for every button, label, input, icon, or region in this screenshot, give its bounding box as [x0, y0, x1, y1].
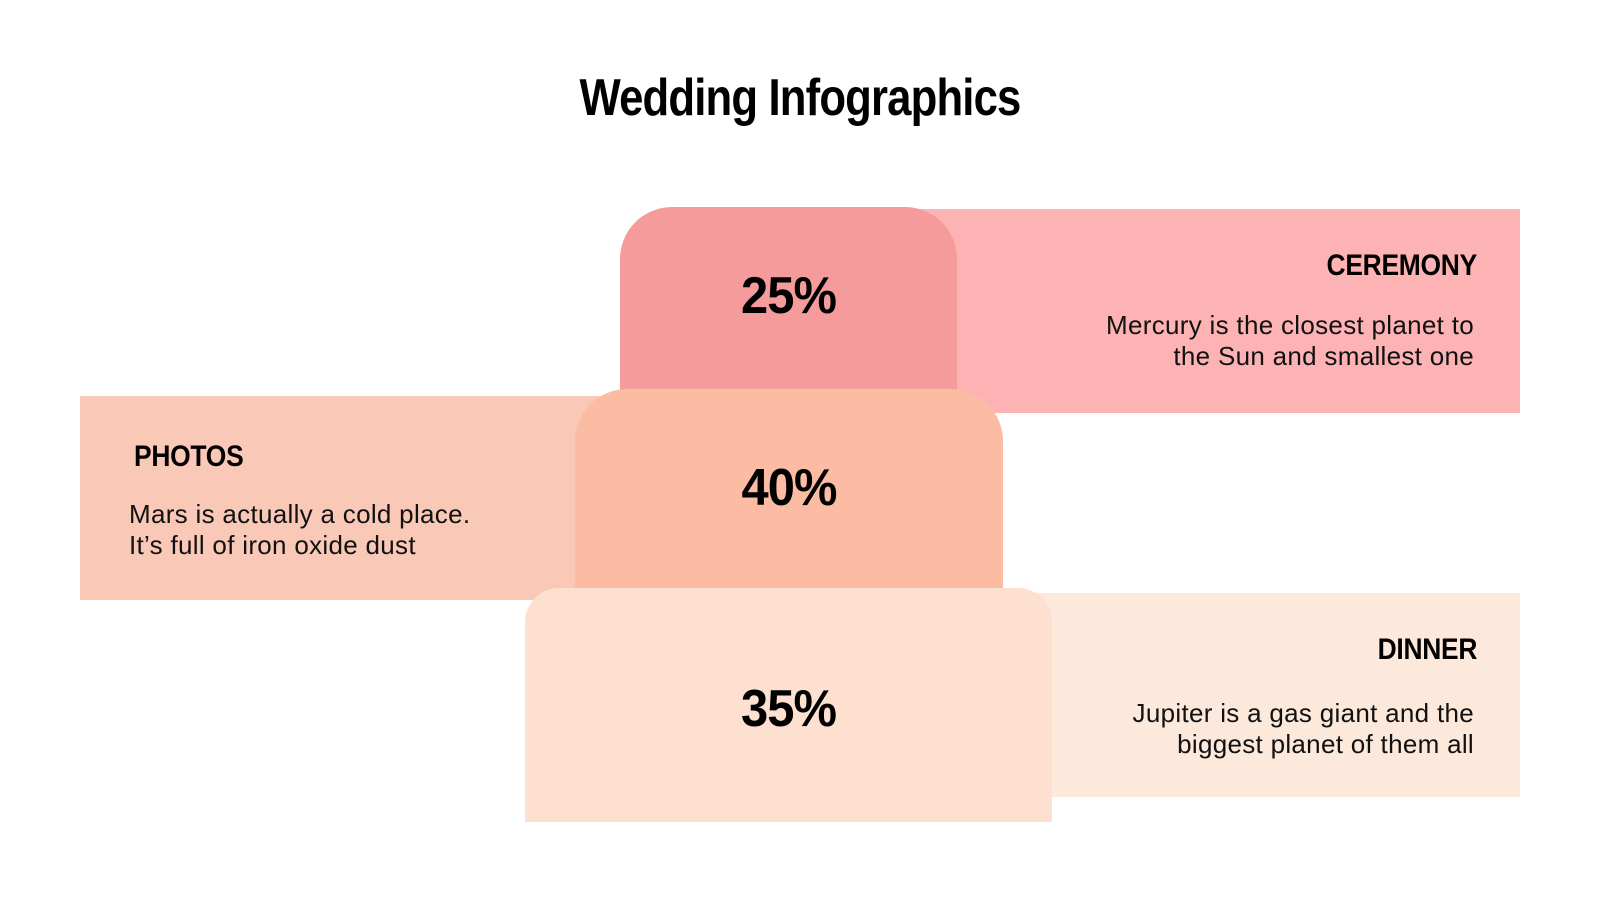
text: ceremony: Mercury is the closest planet to: [1106, 310, 1474, 340]
text: ceremony: [1106, 310, 1474, 371]
panel: ceremony band: [918, 209, 1520, 413]
text: photos: [129, 499, 470, 560]
percentage: 35%: 35%: [741, 680, 836, 738]
text: ceremony: the Sun and smallest one: [1173, 341, 1474, 371]
text: dinner: Jupiter is a gas giant and the: [1133, 698, 1474, 728]
text: dinner: biggest planet of them all: [1177, 729, 1474, 759]
cake tier: middle 40%: [575, 389, 1003, 592]
panel: dinner band: [1020, 593, 1520, 797]
heading: photos: PHOTOS: [134, 440, 243, 473]
heading: ceremony: CEREMONY: [1327, 249, 1477, 282]
heading: dinner: DINNER: [1377, 633, 1477, 666]
text: photos: It’s full of iron oxide dust: [129, 530, 416, 560]
percentage: 40%: 40%: [741, 459, 836, 517]
text: dinner: [1132, 698, 1474, 759]
panel: photos band: [80, 396, 612, 600]
percentage: 25%: 25%: [741, 267, 836, 325]
title: Wedding Infographics: [579, 69, 1021, 127]
cake tier: top 25%: [620, 207, 957, 408]
cake tier: bottom 35%: [525, 588, 1052, 822]
text: photos: Mars is actually a cold place.: [129, 499, 470, 529]
